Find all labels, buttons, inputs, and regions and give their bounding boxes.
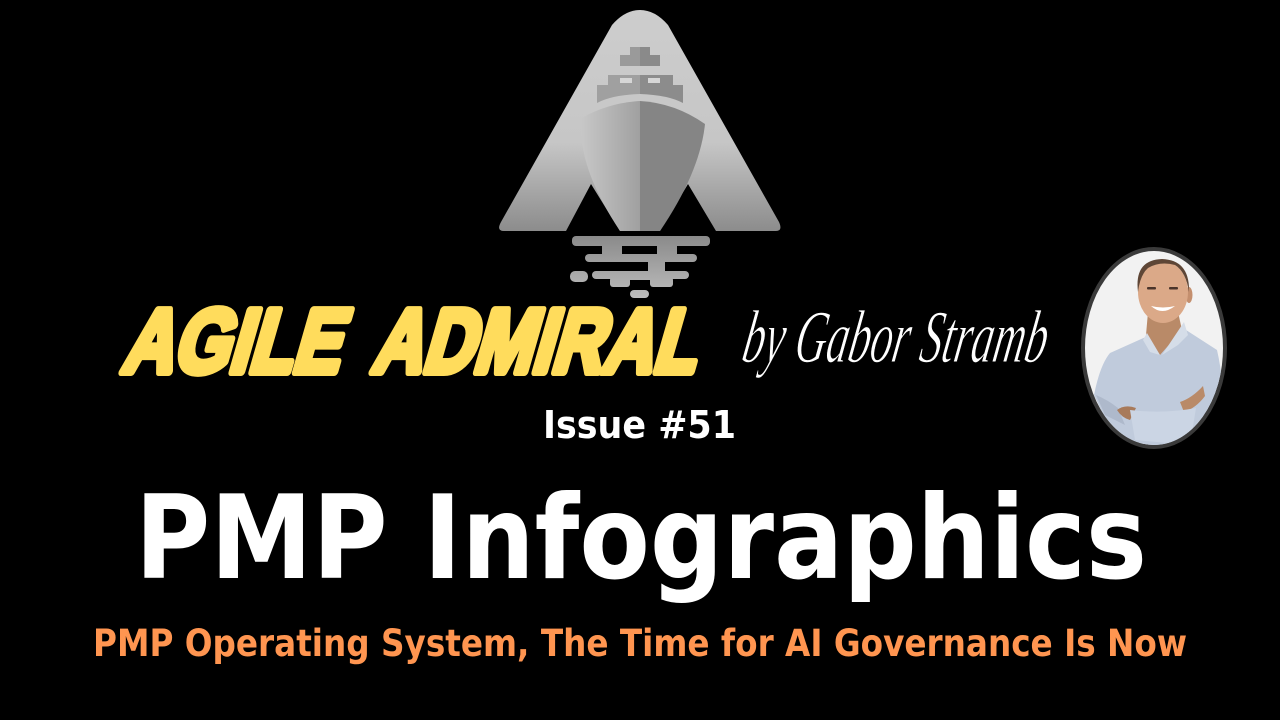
hair xyxy=(1138,259,1189,292)
portrait frame xyxy=(1083,249,1225,447)
shirt xyxy=(1094,330,1222,450)
crossed arms xyxy=(1096,386,1205,445)
water reflection xyxy=(570,236,710,298)
head xyxy=(1138,261,1188,323)
brand name: Agile Admiral xyxy=(114,292,717,392)
brand name: Agile Admiral: AGILE xyxy=(114,292,361,392)
author portrait xyxy=(1083,249,1225,450)
logo letter A xyxy=(499,10,780,231)
brand name: Agile Admiral: ADMIRAL xyxy=(364,292,717,392)
ship upper deck xyxy=(620,47,660,66)
collar xyxy=(1143,322,1188,355)
ears xyxy=(1186,287,1192,303)
portrait figure xyxy=(1094,259,1222,450)
issue number: Issue #51 xyxy=(543,403,736,447)
eyes xyxy=(1147,287,1178,290)
main title: PMP Infographics xyxy=(135,471,1147,606)
signature: by Gabor Stramb: by Gabor Stramb xyxy=(737,296,1056,378)
ship hull xyxy=(581,101,705,231)
smile xyxy=(1151,306,1175,311)
neck xyxy=(1146,312,1182,355)
ship lower deck with windows xyxy=(597,75,683,103)
logo: ship in letter A xyxy=(499,10,780,298)
